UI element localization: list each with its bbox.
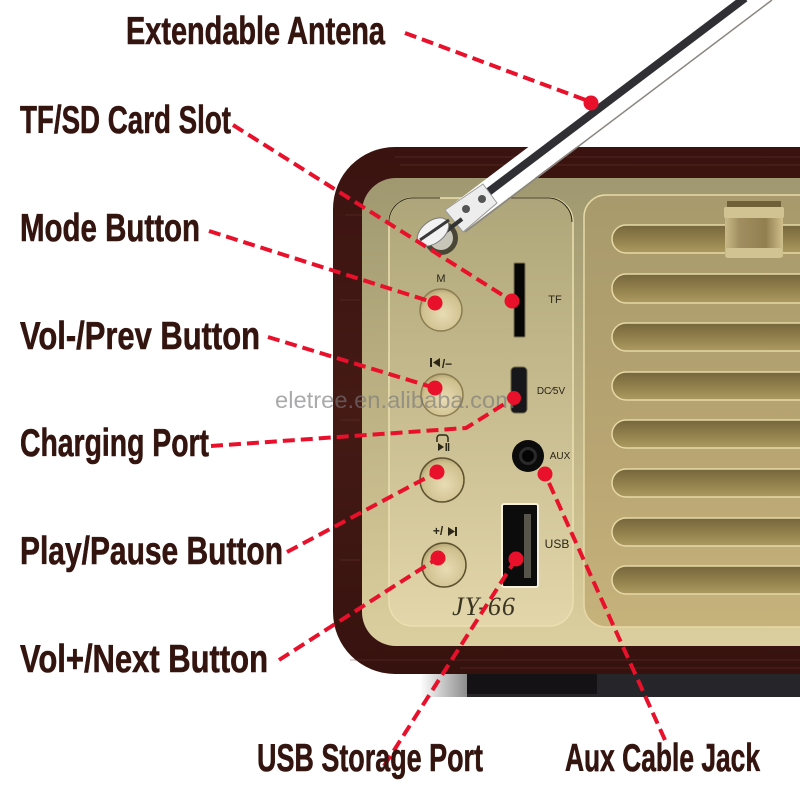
label: USB Storage Port: USB Storage Port [257, 737, 483, 780]
M button [420, 273, 462, 331]
watermark: eletree.en.alibaba.com [275, 387, 515, 413]
shadow under radio [420, 672, 800, 697]
previous / minus button [421, 357, 463, 416]
grille panel [584, 195, 800, 627]
callout: USB port [384, 552, 524, 766]
plus / next button [422, 524, 466, 587]
micro USB charging port [511, 367, 565, 413]
callout: charging port [211, 391, 521, 446]
wooden radio body [333, 147, 800, 674]
callout: aux jack [538, 466, 665, 740]
control panel [389, 198, 573, 626]
model name: JY-66 [452, 592, 516, 621]
gold faceplate [362, 178, 800, 646]
translucent clip on grille [724, 201, 784, 258]
label: Extendable Antena: Extendable Antena [126, 10, 385, 53]
aux jack [512, 440, 571, 472]
USB port [502, 504, 569, 587]
callout: mode button [209, 231, 442, 310]
previous / minus button: /− [442, 357, 452, 371]
label: Vol-/Prev Button: Vol-/Prev Button [20, 315, 260, 358]
label: Play/Pause Button: Play/Pause Button [20, 530, 283, 573]
extendable antenna [412, 0, 772, 255]
plus / next button: +/ [433, 524, 444, 538]
aux jack: AUX [550, 451, 571, 462]
play pause button [420, 435, 464, 502]
callout: antenna [405, 33, 598, 110]
M button: M [436, 273, 446, 285]
label: Mode Button: Mode Button [20, 207, 200, 250]
callout: play/pause button [287, 464, 444, 552]
TF card slot: TF [548, 294, 562, 306]
callout: vol- button [268, 337, 442, 396]
label: Charging Port: Charging Port [20, 422, 209, 465]
callout: vol+ button [279, 550, 446, 660]
TF card slot [514, 263, 562, 337]
label: Vol+/Next Button: Vol+/Next Button [20, 638, 268, 681]
micro USB charging port: DC⁄5V [537, 386, 565, 397]
callout: TF slot [233, 125, 520, 308]
grille slots [612, 225, 800, 594]
label: TF/SD Card Slot: TF/SD Card Slot [20, 99, 231, 142]
USB port: USB [545, 537, 569, 551]
